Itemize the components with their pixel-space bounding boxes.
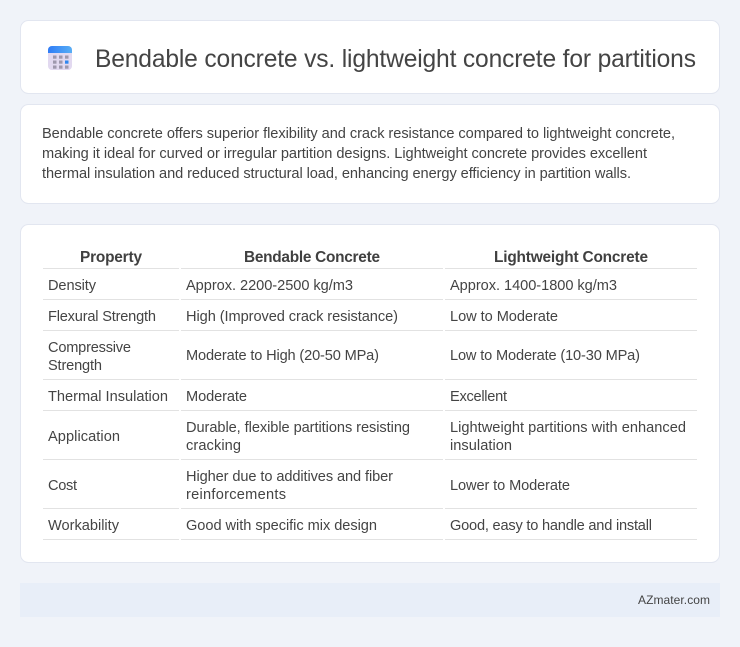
row: flexural strength xyxy=(48,309,558,325)
row: cost: Higher due to additives and fiber xyxy=(186,469,393,485)
row: application: Application xyxy=(48,429,120,445)
row: application: cracking xyxy=(186,438,241,454)
panel: title card xyxy=(20,20,720,94)
row: application: insulation xyxy=(450,438,512,454)
footer xyxy=(20,583,720,617)
row: workability: Good, easy to handle and install xyxy=(450,518,652,534)
row: workability xyxy=(48,518,652,534)
footer text: AZmater.com xyxy=(638,593,710,607)
table header xyxy=(80,249,648,266)
row: thermal insulation: Thermal Insulation xyxy=(48,389,168,405)
row: flexural strength: Flexural Strength xyxy=(48,309,156,325)
row: cost: Lower to Moderate xyxy=(450,478,570,494)
row: density xyxy=(48,278,617,294)
row: thermal insulation: Moderate xyxy=(186,389,247,405)
row: cost: reinforcements xyxy=(186,487,286,503)
row: density: Approx. 1400-1800 kg/m3 xyxy=(450,278,617,294)
row: compressive strength: Low to Moderate (10-30 MPa) xyxy=(450,348,640,364)
panel: comparison table xyxy=(20,224,720,562)
row: flexural strength: Low to Moderate xyxy=(450,309,558,325)
row: cost xyxy=(48,469,570,503)
row: workability: Good with specific mix design xyxy=(186,518,377,534)
table header: Bendable Concrete xyxy=(244,249,380,266)
row: compressive strength: Strength xyxy=(48,358,102,374)
row: compressive strength: Moderate to High (20-50 MPa) xyxy=(186,348,379,364)
row: application: Lightweight partitions with enhanced xyxy=(450,420,686,436)
row: application xyxy=(48,420,686,454)
row: thermal insulation xyxy=(48,389,507,405)
row: compressive strength xyxy=(48,340,640,374)
text block: summary paragraph xyxy=(42,126,675,182)
table header: Lightweight Concrete xyxy=(494,249,648,266)
icon: calendar xyxy=(48,46,72,70)
title: Bendable concrete vs. lightweight concrete for partitions xyxy=(95,46,696,73)
text block: summary paragraph: Bendable concrete offers superior flexibility and crack resistance compared to lightweight concrete, xyxy=(42,126,675,142)
row: thermal insulation: Excellent xyxy=(450,389,507,405)
row: compressive strength: Compressive xyxy=(48,340,131,356)
row: density: Density xyxy=(48,278,97,294)
text block: summary paragraph: making it ideal for curved or irregular partition designs. Lightweight concrete provides excellent xyxy=(42,146,647,162)
row: density: Approx. 2200-2500 kg/m3 xyxy=(186,278,353,294)
text block: summary paragraph: thermal insulation and reduced structural load, enhancing energy efficiency in partition walls. xyxy=(42,166,631,182)
row: application: Durable, flexible partitions resisting xyxy=(186,420,410,436)
row: cost: Cost xyxy=(48,478,77,494)
table header: Property xyxy=(80,249,142,266)
row: flexural strength: High (Improved crack resistance) xyxy=(186,309,398,325)
row: workability: Workability xyxy=(48,518,120,534)
panel: summary xyxy=(20,104,720,204)
